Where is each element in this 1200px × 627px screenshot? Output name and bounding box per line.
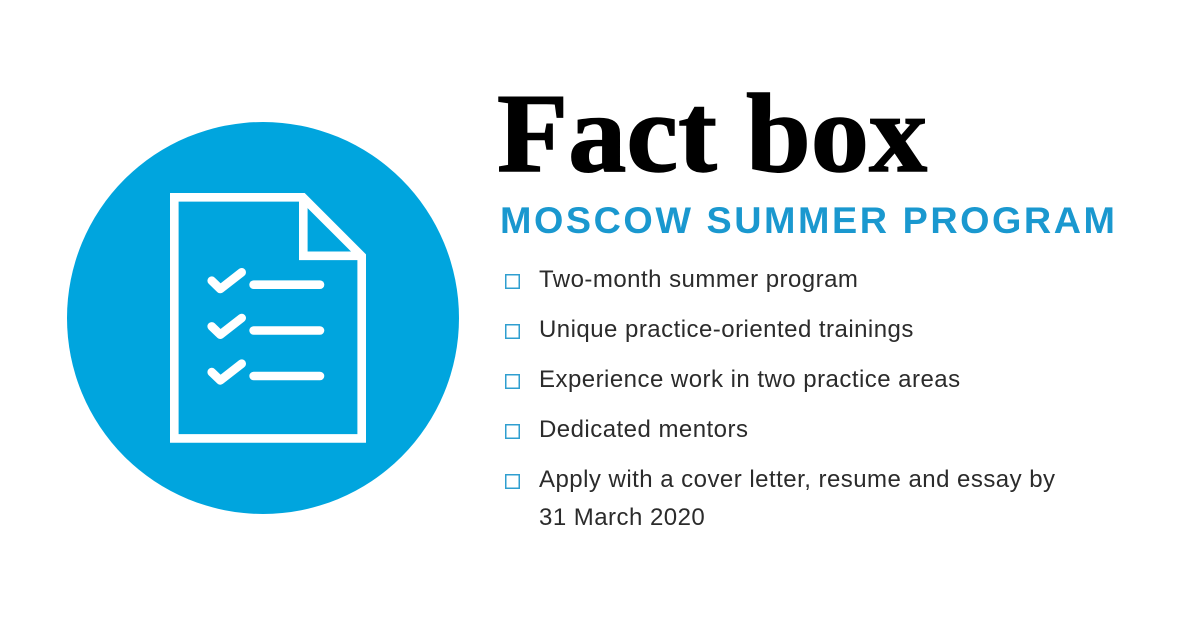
item 2: Unique practice-oriented trainings xyxy=(539,316,914,343)
item 1: Two-month summer program xyxy=(539,266,858,293)
title: Fact box xyxy=(497,72,927,196)
item 3: Experience work in two practice areas xyxy=(539,366,961,393)
item 5: 31 March 2020 xyxy=(539,504,705,531)
bullet 2 xyxy=(505,324,520,339)
item 4: Dedicated mentors xyxy=(539,416,748,443)
bullet 4 xyxy=(505,424,520,439)
subtitle: MOSCOW SUMMER PROGRAM xyxy=(500,200,1118,241)
item 5 xyxy=(539,466,1056,531)
icon: document with checklist in blue circle xyxy=(67,122,459,514)
bullet 3 xyxy=(505,374,520,389)
bullet 1 xyxy=(505,274,520,289)
bullet list xyxy=(505,266,1056,531)
bullet 5 xyxy=(505,474,520,489)
item 5: Apply with a cover letter, resume and essay by xyxy=(539,466,1056,493)
